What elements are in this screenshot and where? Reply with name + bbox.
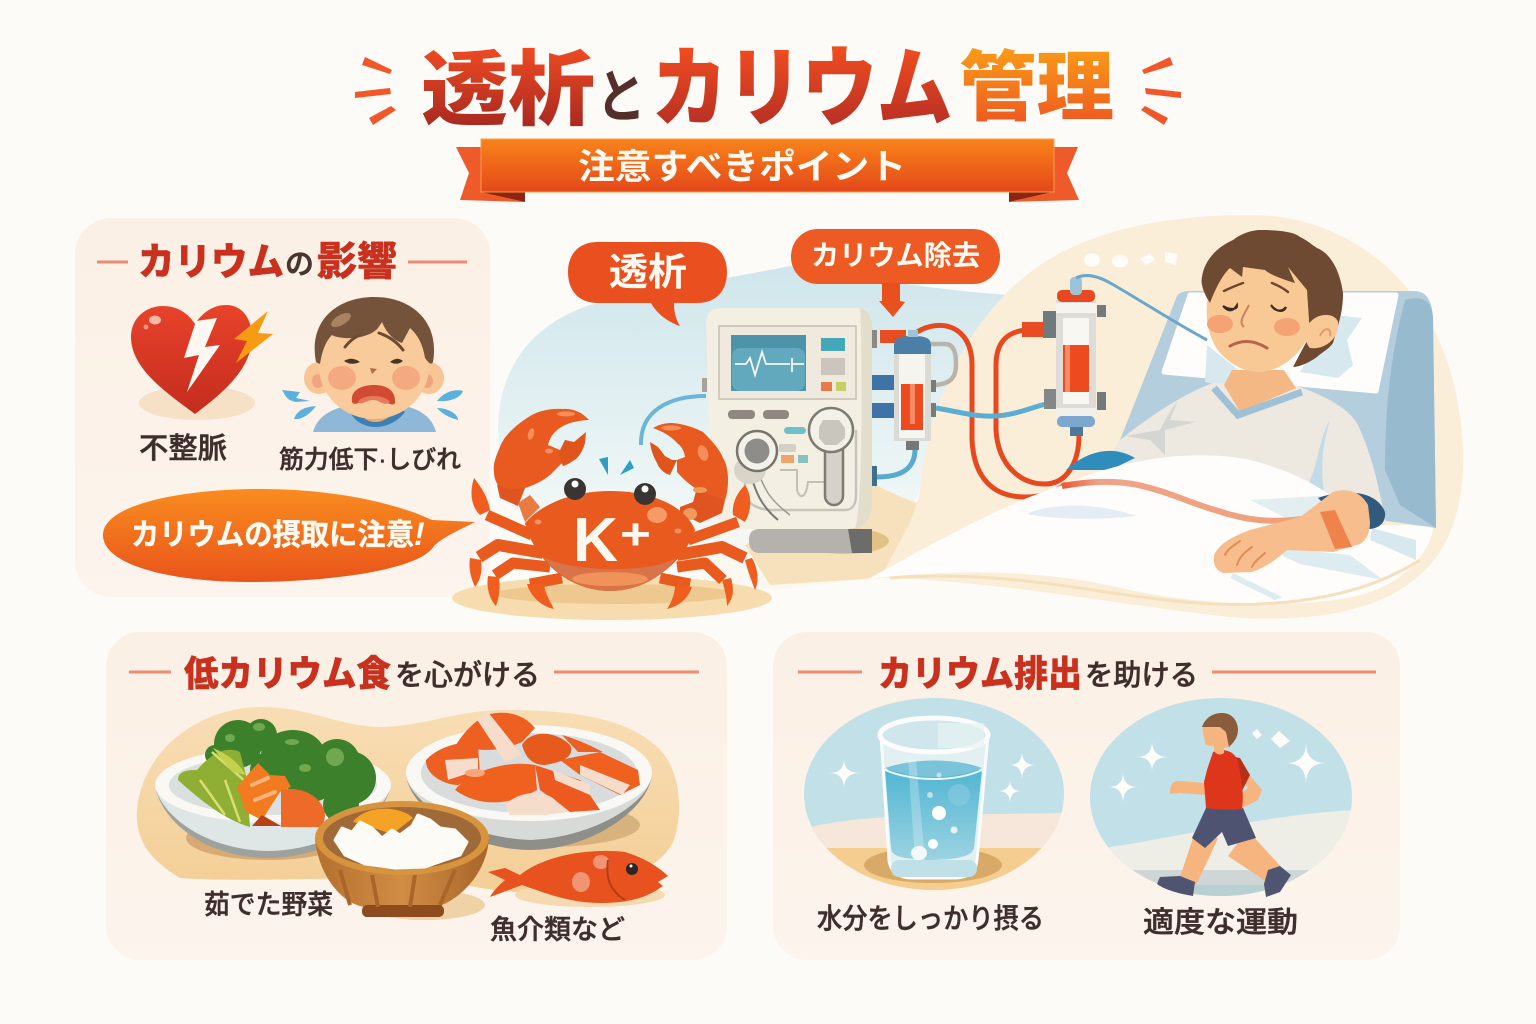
tube: blood line across blanket [1062,482,1310,521]
speech bubble: potassium removal: カリウム除去 [811,240,980,271]
icon: distressed boy [282,297,463,432]
K+ label [573,506,651,575]
K+ label: + [620,510,651,559]
tube: grey loop [931,344,956,385]
patient hair and face [1207,255,1312,372]
panel: help potassium excretion [773,632,1400,960]
label: drink plenty of water: 水分をしっかり摂る [817,903,1044,934]
ribbon banner [456,139,1079,202]
sparkles [1108,729,1326,803]
crab mascot [452,409,772,620]
drinking glass [880,718,988,878]
bed backrest [1120,291,1436,528]
filter one [872,330,936,450]
heading: potassium effects: 影響 [317,240,397,284]
ribbon text: 注意すべきポイント [578,148,906,187]
dialysis machine [702,308,889,554]
crab right claw [650,423,728,523]
label: muscle weakness and numbness: 筋力低下·しびれ [279,446,461,474]
seafood pieces [426,712,640,815]
crab leg tips [469,478,758,609]
patient [1100,230,1386,525]
heading: low potassium diet [129,653,699,694]
crab legs [479,515,745,584]
blanket lower edge [890,560,1420,604]
title rays right [1141,57,1181,125]
scene: glass of water [800,695,1070,898]
green vegetables [178,748,250,827]
sparkles [829,752,1036,803]
walker [1157,713,1291,897]
blanket [868,451,1433,604]
patient neck and collar [1224,370,1296,412]
blanket shadows [1280,548,1383,580]
food background shape [137,707,679,893]
machine buttons [728,338,846,463]
label: boiled vegetables: 茹でた野菜 [204,890,333,920]
title text: と [596,65,646,130]
speech bubble: potassium removal [791,229,1000,317]
machine screen with pulse line [731,335,806,391]
icon: heart with lightning [131,305,273,420]
crab body [525,491,695,591]
tube: blue line to patient [1076,276,1207,340]
tube: blue middle link [936,404,1046,416]
bowl: rice [315,801,489,920]
title [355,41,1181,137]
heading: potassium effects: の [285,249,314,281]
crab eyes [564,478,656,505]
heading: help excretion: カリウム排出 [878,653,1082,694]
bowl: boiled vegetables [155,719,391,860]
tube: red loop [996,330,1079,484]
title text: 透析 [421,45,595,136]
label: seafood etc.: 魚介類など [490,915,625,945]
speech bubble: dialysis: 透析 [609,252,687,294]
heading: low potassium diet: 低カリウム食 [184,653,391,694]
patient torso [1100,383,1386,525]
fish [488,851,668,907]
patient arm [1214,490,1385,573]
tube: long red line [917,325,1066,497]
machine dials [734,408,853,505]
speech bubble: dialysis [568,242,727,326]
squash slice [353,809,413,834]
dialysis scene background [498,215,1463,619]
heading: low potassium diet: を心がける [395,659,540,692]
panel: low potassium diet [106,632,727,960]
carrots [237,763,325,827]
callout: watch potassium intake [103,489,475,582]
alert ticks [599,457,634,475]
callout: watch potassium intake: カリウムの摂取に注意 [131,519,414,552]
heading: potassium effects: カリウム [138,242,284,284]
pillow [1164,295,1396,391]
title text: カリウム [652,41,952,137]
crab left claw [494,409,589,522]
tube: blue return behind machine [641,396,706,445]
broccoli [205,719,376,823]
title rays left [355,57,396,125]
plate: seafood [406,712,652,850]
filter two [1022,277,1106,436]
label: arrhythmia: 不整脈 [139,432,227,465]
heading: help excretion: を助ける [1085,659,1198,692]
title text [421,41,1114,137]
panel: effects of potassium [75,218,490,597]
crab ground shadow [452,576,772,620]
title text: 管理 [959,46,1114,131]
K+ label: K [573,506,618,575]
tube: blue lower link [877,449,915,477]
rice [335,815,467,868]
heading: help excretion [798,653,1376,694]
scene: walking person [1088,695,1354,900]
callout: watch potassium intake: ! [414,516,425,552]
heading: potassium effects [97,240,467,284]
label: moderate exercise: 適度な運動 [1143,906,1298,939]
sigh puffs [1084,252,1177,268]
